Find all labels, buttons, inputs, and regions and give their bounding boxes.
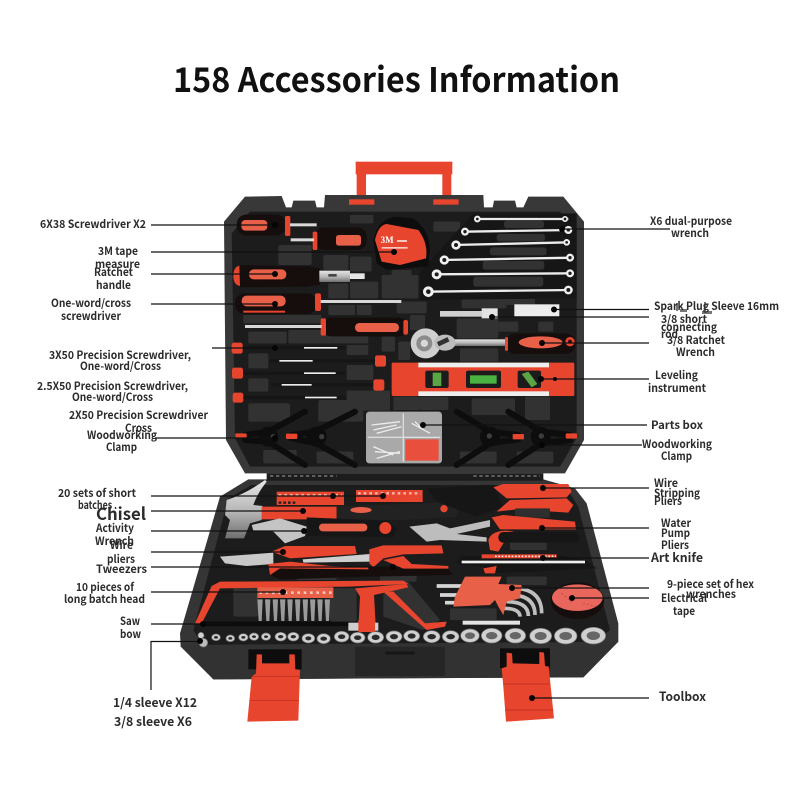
icon: saw bow with ten long bits bbox=[195, 581, 520, 632]
icon: six combination wrenches bbox=[423, 216, 574, 297]
label: 10 pieces of long batch head bbox=[64, 579, 286, 607]
label: 6X38 screwdriver: 6X38 Screwdriver X2 bbox=[40, 216, 146, 232]
icon: carry handle bbox=[356, 162, 452, 201]
label: 3/8 short connecting rod: connecting bbox=[661, 319, 717, 335]
label: wire pliers: pliers bbox=[107, 551, 136, 567]
label: wire pliers: Wire bbox=[110, 537, 133, 553]
label: tweezers bbox=[96, 561, 396, 577]
label: 2.5X50 precision screwdriver bbox=[37, 378, 188, 405]
label: leveling instrument: Leveling bbox=[655, 367, 698, 383]
label: 2X50 precision screwdriver: Cross bbox=[125, 420, 152, 436]
icon: chisel hammer bbox=[225, 480, 458, 538]
icon: 3M tape measure: 3M bbox=[381, 235, 394, 245]
label: saw bow: Saw bbox=[120, 613, 140, 629]
label: water pump pliers: Water bbox=[661, 515, 691, 531]
label: ratchet handle: handle bbox=[96, 277, 131, 293]
label: X6 dual-purpose wrench bbox=[559, 213, 732, 241]
icon: electrical tape bbox=[551, 582, 604, 619]
label: sleeves: 3/8 sleeve X6 bbox=[114, 711, 192, 730]
label: 3/8 short connecting rod: rod bbox=[661, 326, 678, 342]
label: sleeves bbox=[113, 638, 203, 730]
label: 3/8 ratchet wrench: Wrench bbox=[676, 344, 715, 360]
icon: 6X38 screwdrivers bbox=[237, 214, 367, 250]
icon: 20 short batch bits bbox=[277, 490, 423, 505]
label: leveling instrument bbox=[538, 367, 706, 396]
label: woodworking clamp left: Clamp bbox=[106, 439, 137, 455]
label: wire stripping pliers: Stripping bbox=[654, 485, 700, 501]
label: 2X50 precision screwdriver bbox=[69, 407, 208, 436]
label: wire pliers bbox=[107, 537, 286, 567]
label: electrical tape: tape bbox=[673, 603, 695, 619]
label: 6X38 screwdriver bbox=[40, 216, 278, 232]
label: activity wrench: Activity bbox=[95, 520, 135, 536]
icon: left latch bbox=[247, 649, 302, 722]
label: 3M tape measure: measure bbox=[95, 256, 140, 272]
label: parts box: Parts box bbox=[651, 417, 703, 433]
icon: leveling instrument bbox=[392, 363, 574, 396]
icon: wire pliers bbox=[220, 546, 453, 579]
label: woodworking clamp right bbox=[539, 436, 712, 464]
label: one-word/cross screwdriver bbox=[51, 295, 278, 324]
icon: ratchet handle bbox=[233, 265, 365, 287]
label: 3M tape measure bbox=[95, 243, 397, 272]
label: saw bow bbox=[120, 613, 206, 642]
label: woodworking clamp left: Woodworking bbox=[87, 427, 157, 443]
icon: wire stripping pliers bbox=[427, 484, 573, 518]
toolbox base tray bbox=[180, 473, 618, 722]
label: 3X50 precision screwdriver: 3X50 Precision Screwdriver, bbox=[49, 347, 191, 363]
label: 10 pieces of long batch head: long batch head bbox=[64, 591, 145, 607]
label: 9-piece hex wrenches: 9-piece set of hex bbox=[667, 576, 754, 592]
icon: short connecting rod and spark plug sleeve bbox=[440, 304, 559, 318]
label: parts box bbox=[420, 417, 703, 433]
label: water pump pliers: Pliers bbox=[661, 537, 689, 553]
label: art knife bbox=[540, 547, 703, 566]
label: 3/8 ratchet wrench bbox=[539, 332, 725, 360]
label: wire stripping pliers bbox=[540, 475, 700, 509]
label: leveling instrument: instrument bbox=[648, 380, 706, 396]
label: 10 pieces of long batch head: 10 pieces of bbox=[76, 579, 135, 595]
label: water pump pliers bbox=[539, 515, 691, 553]
smudge marks near spark plug label bbox=[676, 302, 712, 314]
label: one-word/cross screwdriver: screwdriver bbox=[61, 308, 121, 324]
label: saw bow: bow bbox=[120, 626, 141, 642]
label: activity wrench bbox=[95, 520, 307, 549]
label: X6 dual-purpose wrench: wrench bbox=[671, 225, 709, 241]
label: spark plug sleeve: Spark Plug Sleeve 16mm bbox=[654, 298, 779, 314]
icon: right latch bbox=[500, 648, 554, 722]
label: X6 dual-purpose wrench: X6 dual-purpose bbox=[650, 213, 732, 229]
icon: art knife bbox=[456, 554, 597, 573]
wrench tray bbox=[420, 213, 577, 300]
label: 20 sets of short batches bbox=[58, 485, 386, 513]
label: woodworking clamp left bbox=[87, 427, 278, 455]
label: 20 sets of short batches: 20 sets of short bbox=[58, 485, 136, 501]
label: woodworking clamp right: Clamp bbox=[661, 448, 692, 464]
label: spark plug sleeve bbox=[551, 298, 779, 314]
icon: parts box bbox=[366, 412, 442, 463]
label: 9-piece hex wrenches: wrenches bbox=[686, 586, 737, 602]
label: 2.5X50 precision screwdriver: 2.5X50 Precision Screwdriver, bbox=[37, 378, 188, 394]
label: 2.5X50 precision screwdriver: One-word/Cross bbox=[72, 389, 154, 405]
icon: one-word/cross screwdrivers bbox=[235, 293, 408, 336]
label: ratchet handle bbox=[94, 264, 278, 293]
label: wire stripping pliers: Pliers bbox=[654, 493, 682, 509]
label: sleeves: 1/4 sleeve X12 bbox=[113, 692, 197, 711]
label: tweezers: Tweezers bbox=[96, 561, 148, 577]
label: wire stripping pliers: Wire bbox=[654, 475, 678, 491]
label: water pump pliers: Pump bbox=[661, 525, 690, 541]
label: 9-piece hex wrenches bbox=[509, 576, 754, 602]
label: 3M tape measure: 3M tape bbox=[98, 243, 138, 259]
icon: tweezers bbox=[303, 545, 448, 569]
label: 3/8 short connecting rod bbox=[489, 311, 717, 342]
label: 2X50 precision screwdriver: 2X50 Precision Screwdriver bbox=[69, 407, 208, 423]
label: toolbox bbox=[529, 686, 706, 705]
icon: water pump pliers bbox=[409, 515, 579, 552]
label: chisel: Chisel bbox=[96, 500, 146, 525]
label: 3X50 precision screwdriver bbox=[49, 345, 278, 374]
toolbox lid bbox=[224, 162, 584, 473]
label: electrical tape bbox=[569, 590, 707, 619]
label: toolbox: Toolbox bbox=[659, 686, 706, 705]
label: electrical tape: Electrical bbox=[661, 590, 707, 606]
icon: precision screwdrivers bbox=[232, 343, 386, 403]
title: 158 Accessories Information bbox=[173, 53, 620, 102]
label: 20 sets of short batches: batches . bbox=[78, 497, 117, 513]
label: one-word/cross screwdriver: One-word/cross bbox=[51, 295, 132, 311]
label: 3/8 ratchet wrench: 3/8 Ratchet bbox=[667, 332, 725, 348]
label: ratchet handle: Ratchet bbox=[94, 264, 133, 280]
icon: ratchet wrench bbox=[411, 328, 575, 358]
label: activity wrench: Wrench bbox=[95, 533, 134, 549]
icon: woodworking clamps bbox=[235, 412, 577, 465]
label: 3/8 short connecting rod: 3/8 short bbox=[661, 311, 707, 327]
icon: 3M tape measure bbox=[373, 217, 430, 270]
label: art knife: Art knife bbox=[650, 547, 703, 566]
icon: socket sleeves bbox=[198, 627, 606, 647]
icon: 9-piece hex wrench set bbox=[437, 577, 542, 617]
label: chisel bbox=[96, 500, 306, 525]
icon: activity wrench bbox=[252, 517, 397, 543]
label: woodworking clamp right: Woodworking bbox=[642, 436, 712, 452]
label: 3X50 precision screwdriver: One-word/Cross bbox=[80, 358, 162, 374]
